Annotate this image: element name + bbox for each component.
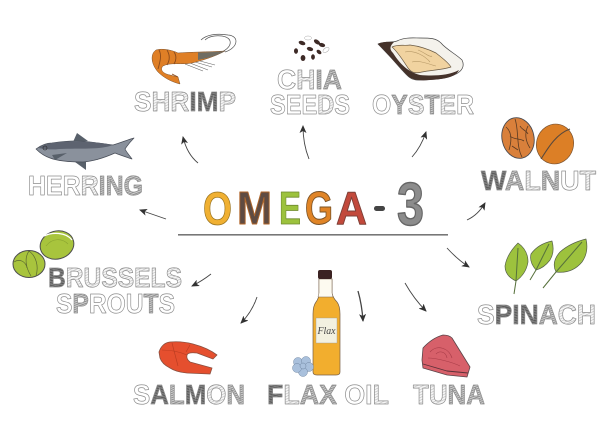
item: herring (28, 133, 143, 201)
label: spinach: SPINACH (477, 299, 596, 330)
arrow: to oyster (412, 132, 426, 157)
arrow: to herring (140, 210, 166, 219)
item: salmon (133, 342, 245, 410)
item: chia seeds (270, 36, 350, 120)
arrow: to spinach (447, 248, 469, 267)
title: OMEGA-3: E (279, 182, 301, 234)
label: chia: CHIA (277, 64, 342, 95)
title underline (178, 234, 448, 236)
title: OMEGA-3: A (336, 182, 367, 234)
bottle label text: Flax (317, 326, 336, 337)
icon: shrimp (152, 34, 236, 84)
label: sprouts: SPROUTS (56, 288, 175, 319)
label: walnut: WALNUT (481, 165, 596, 196)
icon: spinach leaves (505, 239, 587, 294)
item: flax oil (267, 270, 389, 410)
item: brussels sprouts (13, 227, 182, 319)
arrow: to chia seeds (303, 126, 309, 159)
title: OMEGA-3 (203, 171, 424, 238)
label: tuna: TUNA (413, 379, 485, 410)
label: oyster: OYSTER (372, 89, 474, 120)
arrow: to walnut (467, 203, 485, 220)
item: spinach (477, 239, 596, 330)
icon: chia seeds (294, 36, 330, 61)
title: OMEGA-3: 3 (397, 171, 424, 238)
label: shrimp: SHRIMP (134, 86, 236, 117)
arrow: to salmon (241, 297, 257, 323)
icon: flax flower (292, 356, 314, 376)
item: shrimp (134, 34, 236, 117)
arrow: to flax oil (358, 291, 363, 321)
arrow: to shrimp (183, 137, 198, 163)
label: seeds: SEEDS (270, 89, 350, 120)
label: salmon: SALMON (133, 379, 245, 410)
title: OMEGA-3: M (237, 182, 272, 234)
arrow: to brussels sprouts (192, 274, 211, 286)
label: brussels: BRUSSELS (48, 262, 182, 293)
icon: oyster (378, 38, 463, 80)
label: herring: HERRING (28, 170, 143, 201)
label: flax oil: FLAX OIL (267, 379, 389, 410)
title: OMEGA-3: O (203, 182, 232, 234)
title: OMEGA-3: G (305, 182, 333, 234)
icon: tuna steak (422, 335, 470, 377)
icon: brussels sprouts (13, 227, 77, 278)
icon: salmon steak (159, 342, 217, 374)
icon: walnut (498, 115, 578, 168)
arrow: to tuna (405, 283, 426, 311)
item: walnut (481, 115, 596, 196)
item: tuna (413, 335, 485, 410)
icon: herring (36, 133, 134, 170)
item: oyster (372, 38, 474, 120)
